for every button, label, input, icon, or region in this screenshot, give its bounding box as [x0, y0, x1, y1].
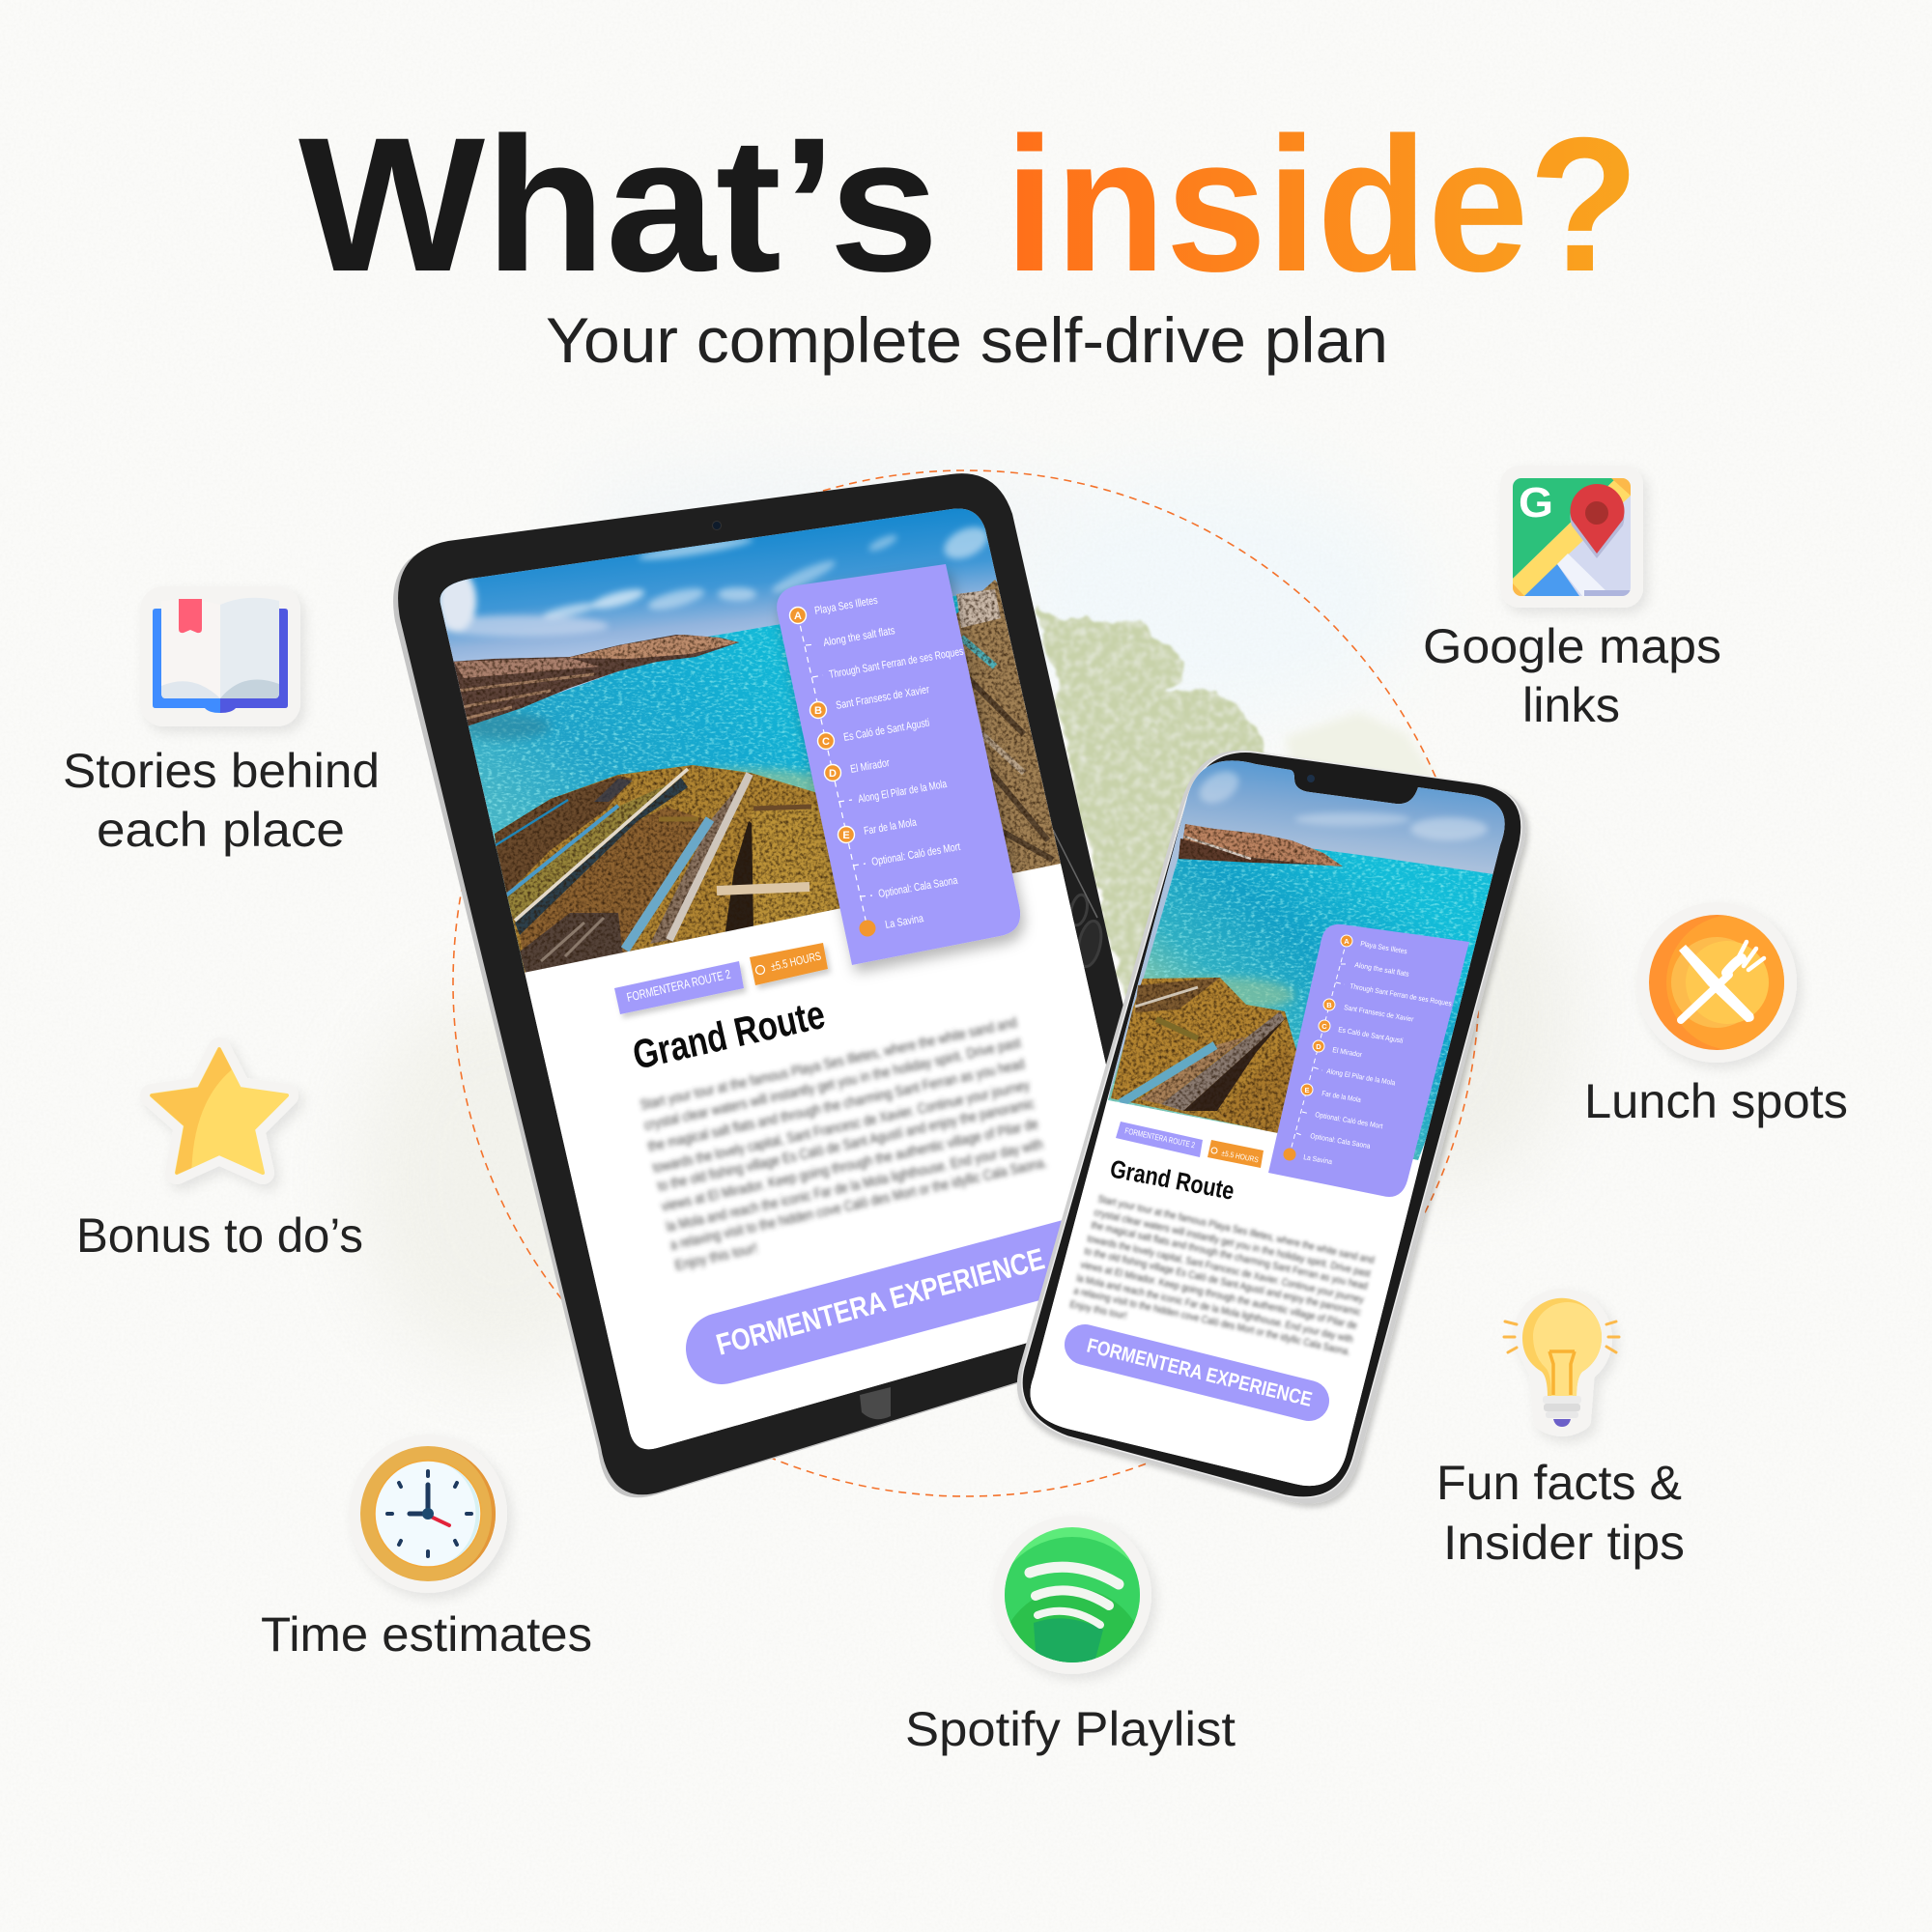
tablet tag: route: FORMENTERA ROUTE 2 — [625, 967, 732, 1005]
tablet marker letters: D — [829, 768, 837, 780]
tablet route stops: Far de la Mola — [863, 817, 918, 838]
tablet blurred paragraph: towards the lovely capital, Sant Francesc de Xavier. Continue your journey — [651, 1077, 1032, 1177]
label: bonus: Bonus to do’s — [76, 1208, 363, 1263]
tablet route stops: La Savina — [884, 913, 924, 931]
tablet silver body — [393, 476, 1191, 1497]
phone photo — [1108, 744, 1536, 1160]
phone blurred paragraph: crystal clear waters will instantly get you in the holiday spirit. Drive past — [1093, 1207, 1372, 1280]
tablet blurred paragraph: la Mola and reach the iconic Far de la Mola lighthouse. End your day with — [665, 1136, 1044, 1236]
tablet photo rocks — [450, 635, 739, 726]
tablet route stops: Optional: Cala Saona — [877, 875, 959, 900]
dashed orange circle — [453, 470, 1479, 1496]
phone blurred paragraph: a relaxing visit to the hidden cove Caló des Mort or the idyllic Cala Saona. — [1072, 1285, 1351, 1358]
phone blurred paragraph: towards the lovely capital, Sant Francesc de Xavier. Continue your journey — [1086, 1233, 1366, 1306]
tablet blurred paragraph — [639, 1014, 1048, 1274]
phone tag: route: FORMENTERA ROUTE 2 — [1124, 1125, 1196, 1150]
label: lunch: Lunch spots — [1584, 1074, 1848, 1128]
phone marker letters: E — [1304, 1086, 1310, 1094]
phone blurred paragraph: the magical salt flats and through the charming Sant Ferran as you head — [1090, 1219, 1369, 1293]
subtitle: Your complete self-drive plan — [546, 304, 1388, 376]
phone heading: Grand Route — [1108, 1153, 1236, 1206]
phone tag: hours — [1208, 1140, 1264, 1168]
phone black bezel — [1022, 752, 1521, 1497]
tablet marker letters: C — [822, 736, 830, 748]
tablet route card — [777, 564, 1020, 965]
label: fun facts: Insider tips — [1443, 1516, 1685, 1570]
tablet card background — [777, 564, 1020, 965]
phone route stops: Along El Pilar de la Mola — [1326, 1066, 1397, 1088]
tablet screen — [440, 508, 1106, 1449]
phone white page — [1005, 744, 1546, 1517]
phone route stops: Along the salt flats — [1354, 960, 1410, 979]
icon: plate and cutlery — [1636, 902, 1802, 1063]
phone route stops: Optional: Cala Saona — [1310, 1131, 1372, 1151]
phone marker letters: B — [1326, 1001, 1332, 1009]
tablet photo clouds — [435, 521, 993, 637]
title word: What's: What’s — [298, 98, 939, 311]
tablet blurred paragraph: views at El Mirador. Keep going through the authentic village of Pilar de — [660, 1116, 1039, 1215]
feature: time — [261, 1435, 592, 1662]
label: google maps — [1423, 619, 1721, 732]
phone photo foreground — [1111, 978, 1299, 1135]
label: google maps: links — [1522, 678, 1620, 732]
icon: open book — [140, 586, 300, 726]
phone route stops: La Savina — [1303, 1152, 1333, 1166]
tablet camera — [713, 522, 721, 529]
tablet route stops — [813, 595, 965, 931]
tablet tag: hours — [750, 943, 828, 985]
tablet marker letters: E — [842, 830, 850, 841]
feature: google maps — [1423, 466, 1721, 732]
tablet button: FORMENTERA EXPERIENCE — [713, 1241, 1048, 1362]
tablet route stops: Playa Ses Illetes — [813, 595, 879, 617]
feature: lunch — [1584, 902, 1848, 1128]
icon: map pin tile — [1500, 466, 1643, 608]
phone photo sea — [1108, 847, 1526, 1160]
phone photo island — [1179, 824, 1343, 867]
phone front camera — [1307, 775, 1315, 782]
phone marker letters: C — [1321, 1022, 1327, 1031]
label: fun facts — [1436, 1456, 1685, 1570]
tablet route stops: Es Caló de Sant Agusti — [842, 718, 930, 744]
phone marker letters — [1304, 937, 1350, 1094]
label: spotify: Spotify Playlist — [905, 1702, 1236, 1756]
tablet rear camera bump — [1053, 830, 1105, 969]
tablet tag: hours: ±5.5 HOURS — [770, 949, 822, 974]
tablet tag: route — [614, 961, 744, 1014]
tablet photo right rocks — [952, 580, 1072, 894]
phone marker letters: D — [1316, 1042, 1321, 1051]
phone route stops: Optional: Caló des Mort — [1315, 1110, 1384, 1130]
phone route card — [1268, 924, 1469, 1197]
tablet bezel smudge — [860, 1387, 891, 1419]
label: stories — [63, 744, 380, 857]
tablet white page — [440, 508, 1106, 1449]
icon: star — [152, 1049, 287, 1173]
tablet route markers — [790, 607, 875, 937]
phone screen — [1005, 744, 1546, 1546]
tablet blurred paragraph: to the old fishing village Es Caló de Sant Agustí and enjoy the panoramic — [656, 1095, 1037, 1195]
tablet route stops: El Mirador — [849, 757, 891, 776]
phone route stops: Through Sant Ferran de ses Roques — [1350, 981, 1453, 1009]
label: fun facts: Fun facts & — [1436, 1456, 1682, 1510]
phone route stops — [1303, 939, 1453, 1166]
phone tag: hours: ±5.5 HOURS — [1221, 1149, 1260, 1164]
phone blurred paragraph: Start your tour at the famous Playa Ses Illetes, where the white sand and — [1096, 1193, 1376, 1266]
title — [298, 98, 1639, 311]
title word: inside?: inside? — [1005, 98, 1639, 311]
phone route stops: Es Caló de Sant Agusti — [1338, 1025, 1404, 1045]
phone route markers — [1283, 935, 1352, 1161]
phone photo planks — [1121, 987, 1215, 1103]
phone route dashes — [1290, 941, 1350, 1154]
tablet photo sea — [454, 594, 1063, 973]
tablet marker letters — [794, 611, 850, 841]
feature: spotify — [905, 1516, 1236, 1756]
tablet route stops: Through Sant Ferran de ses Roques — [828, 646, 965, 681]
phone route stops: Sant Fransesc de Xavier — [1344, 1003, 1415, 1024]
label: stories: Stories behind — [63, 744, 380, 798]
phone route stops: El Mirador — [1332, 1045, 1363, 1059]
tablet photo — [425, 493, 1072, 976]
phone blurred paragraph: la Mola and reach the iconic Far de la Mola lighthouse. End your day with — [1075, 1272, 1354, 1346]
tablet blurred paragraph: the magical salt flats and through the charming Sant Ferran as you head — [646, 1056, 1026, 1155]
phone route stops: Playa Ses Illetes — [1360, 939, 1408, 956]
phone blurred paragraph: views at El Mirador. Keep going through the authentic village of Pilar de — [1079, 1259, 1358, 1332]
tablet photo foreground — [495, 765, 874, 976]
tablet route stops: Optional: Caló des Mort — [870, 841, 962, 868]
tablet marker letters: A — [794, 611, 802, 622]
tablet photo planks — [496, 769, 811, 961]
icon: map pin tile: G — [1519, 479, 1553, 526]
tablet blurred paragraph: a relaxing visit to the hidden cove Caló des Mort or the idyllic Cala Saona. — [668, 1154, 1048, 1254]
tablet blurred paragraph: Enjoy this tour! — [673, 1239, 759, 1274]
icon: light bulb — [1504, 1298, 1619, 1427]
icon: clock — [349, 1435, 507, 1593]
phone route stops: Far de la Mola — [1321, 1089, 1362, 1104]
tablet route dashes — [798, 615, 872, 928]
tablet route stops: Sant Fransesc de Xavier — [835, 684, 930, 712]
tablet blurred paragraph: crystal clear waters will instantly get you in the holiday spirit. Drive past — [642, 1035, 1023, 1134]
phone blurred paragraph: Enjoy this tour! — [1068, 1298, 1128, 1321]
phone button: FORMENTERA EXPERIENCE — [1085, 1335, 1314, 1411]
tablet route stops: Along El Pilar de la Mola — [857, 779, 949, 806]
phone blurred paragraph — [1068, 1193, 1376, 1358]
background trees — [1041, 611, 1439, 1024]
feature: fun facts — [1436, 1298, 1685, 1570]
tablet device — [393, 473, 1198, 1497]
phone tag: route — [1116, 1122, 1203, 1157]
tablet white area lower edge — [524, 864, 1198, 1468]
tablet marker letters: B — [814, 705, 822, 717]
phone silver body — [1017, 751, 1525, 1504]
tablet heading: Grand Route — [629, 991, 829, 1078]
label: stories: each place — [97, 803, 345, 857]
phone card background — [1268, 924, 1469, 1197]
tablet black bezel — [398, 473, 1196, 1494]
phone photo clouds — [1194, 765, 1488, 840]
tablet blurred paragraph: Start your tour at the famous Playa Ses Illetes, where the white sand and — [639, 1014, 1018, 1114]
phone blurred paragraph: to the old fishing village Es Caló de Sant Agustí and enjoy the panoramic — [1083, 1245, 1362, 1319]
label: google maps: Google maps — [1423, 619, 1721, 673]
icon: spotify logo — [991, 1516, 1153, 1735]
phone marker letters: A — [1344, 937, 1350, 946]
tablet route stops: Along the salt flats — [822, 625, 896, 649]
label: time: Time estimates — [261, 1607, 592, 1662]
phone white page lower edge — [1005, 1100, 1418, 1546]
feature: book — [63, 586, 380, 857]
feature: bonus — [76, 1049, 363, 1263]
phone device — [1005, 744, 1546, 1546]
